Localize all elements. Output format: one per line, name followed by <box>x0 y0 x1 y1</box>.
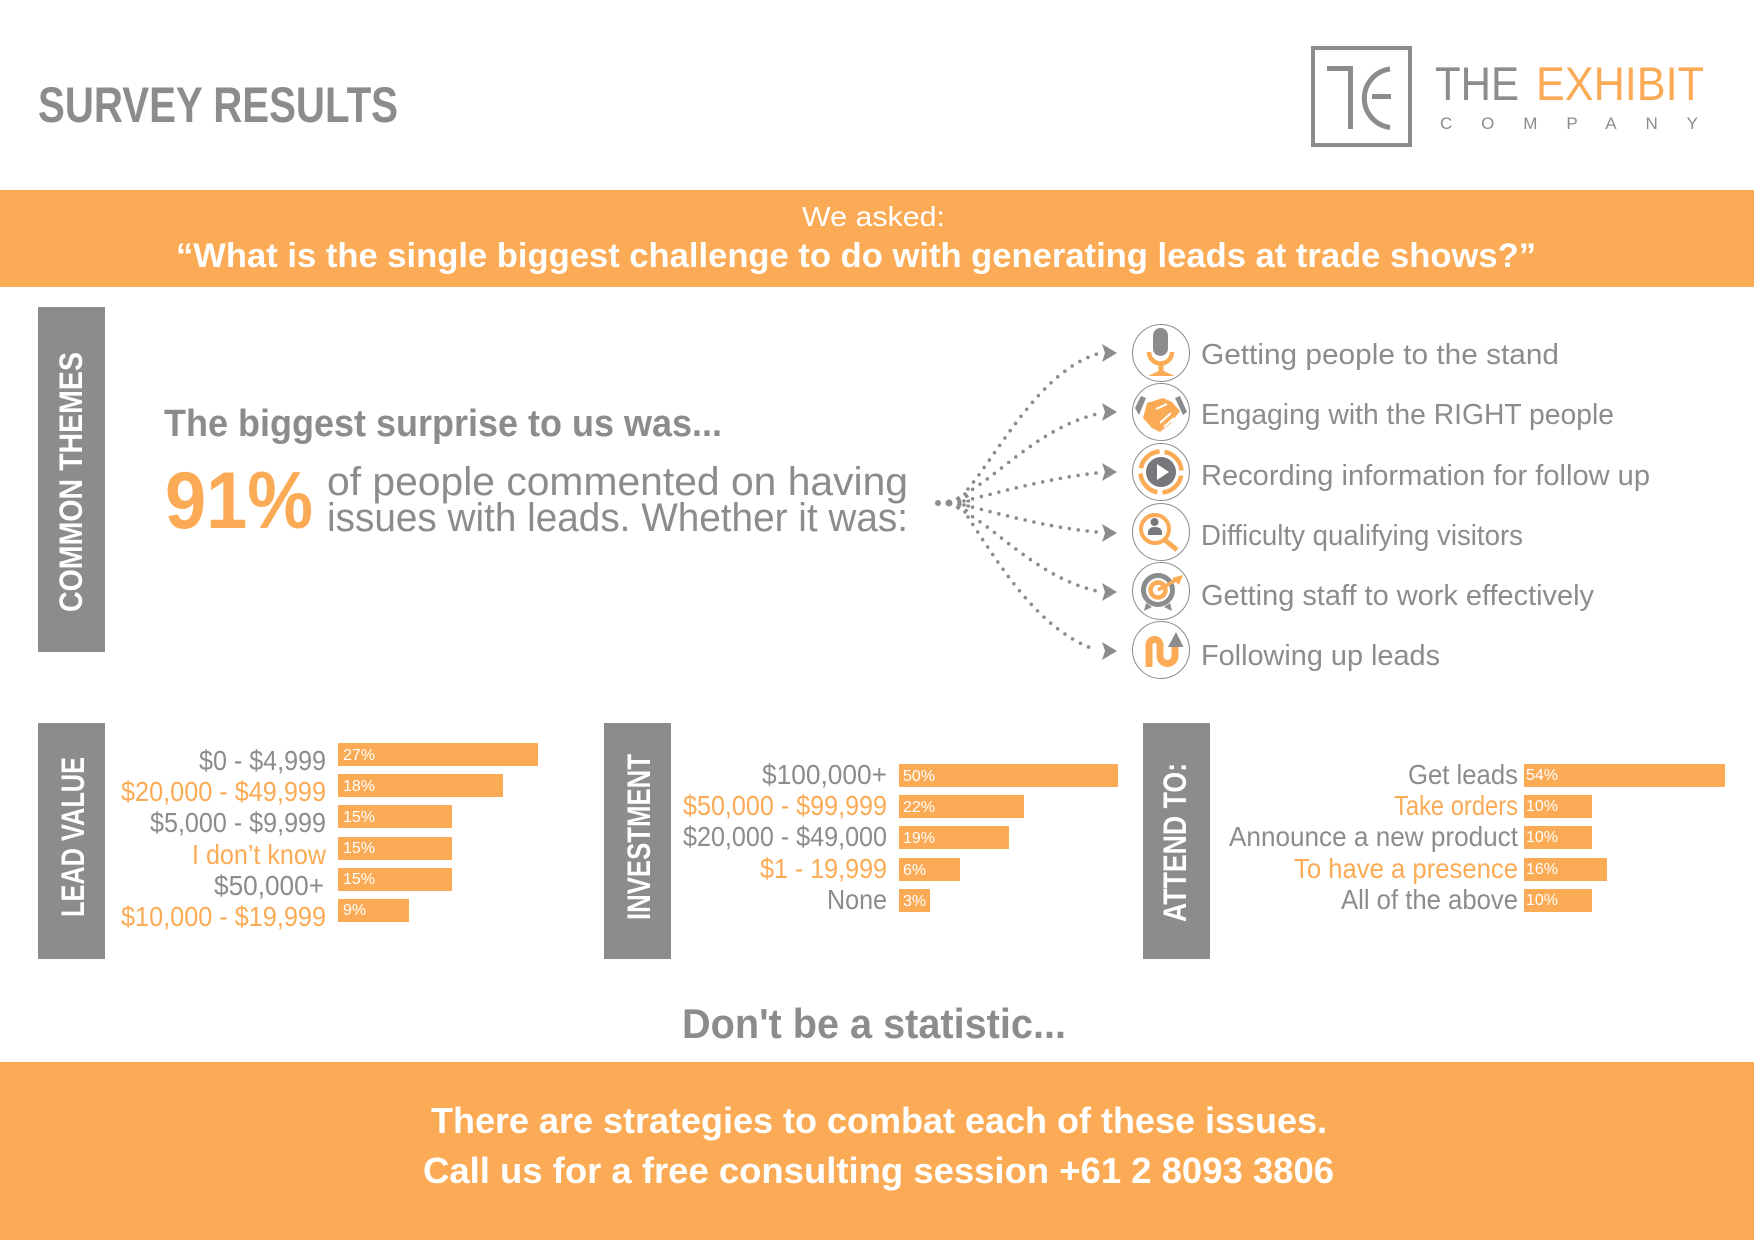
attend to bar chart: 16% <box>1526 861 1558 878</box>
attend to bar chart: Announce a new product <box>1229 821 1518 852</box>
lead value bar chart <box>121 743 538 932</box>
call to action banner: There are strategies to combat each of these issues. <box>431 1100 1327 1141</box>
icon: target <box>1132 562 1190 620</box>
icon: handshake <box>1132 384 1190 440</box>
investment bar chart: $1 - 19,999 <box>760 853 887 884</box>
lead value bar chart: 15% <box>343 809 375 826</box>
icon: upward path <box>1132 622 1190 678</box>
panel label: common themes: COMMON THEMES <box>53 352 89 612</box>
attend to bar chart: 10% <box>1526 829 1558 846</box>
question banner <box>0 190 1754 287</box>
lead value label: LEAD VALUE <box>55 757 91 917</box>
themes list: Engaging with the RIGHT people <box>1201 399 1614 431</box>
lead value bar chart: $10,000 - $19,999 <box>121 901 326 932</box>
attend to bar chart: Take orders <box>1394 790 1518 821</box>
statistic description: of people commented on having <box>327 460 908 504</box>
attend to label: ATTEND TO: <box>1157 763 1193 922</box>
panel: investment <box>604 723 1118 959</box>
lead value bar chart: I don’t know <box>192 839 327 870</box>
investment bar chart: $20,000 - $49,000 <box>683 821 887 852</box>
icon: play button <box>1132 444 1190 500</box>
call to action banner: Call us for a free consulting session +61 2 8093 3806 <box>423 1150 1334 1191</box>
statistic description <box>327 460 908 540</box>
attend to bar chart: 54% <box>1526 767 1558 784</box>
attend to bar chart: To have a presence <box>1294 853 1518 884</box>
attend to bar chart: 10% <box>1526 892 1558 909</box>
lead value bar chart: $50,000+ <box>214 870 324 901</box>
lead value bar chart: $20,000 - $49,999 <box>121 776 326 807</box>
themes list <box>1201 339 1650 672</box>
lead value bar chart: 9% <box>343 902 366 919</box>
attend to bar chart: All of the above <box>1341 884 1518 915</box>
themes list: Getting staff to work effectively <box>1201 580 1594 612</box>
themes list: Following up leads <box>1201 640 1440 672</box>
icon: magnifier with person <box>1132 504 1190 560</box>
surprise heading: The biggest surprise to us was... <box>164 403 722 445</box>
investment bar chart: 6% <box>903 862 926 879</box>
call to action banner <box>0 1062 1754 1240</box>
dotted fan arrows <box>935 344 1117 660</box>
panel label: common themes <box>38 307 105 652</box>
investment bar chart: $50,000 - $99,999 <box>683 790 887 821</box>
attend to bar chart: 10% <box>1526 798 1558 815</box>
lead value bar chart: 27% <box>343 747 375 764</box>
91% statistic: 91% <box>165 456 313 546</box>
lead value label <box>38 723 105 959</box>
themes list: Recording information for follow up <box>1201 460 1650 492</box>
investment label: INVESTMENT <box>621 754 657 920</box>
lead value bar chart: $0 - $4,999 <box>199 745 326 776</box>
attend to label <box>1143 723 1210 959</box>
themes list: Getting people to the stand <box>1201 339 1559 371</box>
panel: lead value <box>38 723 538 959</box>
investment bar chart: 19% <box>903 830 935 847</box>
investment label <box>604 723 671 959</box>
attend to bar chart <box>1229 759 1725 915</box>
lead value bar chart: 15% <box>343 871 375 888</box>
themes list: Difficulty qualifying visitors <box>1201 520 1523 552</box>
icon: microphone <box>1132 324 1190 382</box>
logo <box>1313 48 1704 145</box>
statistic description: issues with leads. Whether it was: <box>327 496 908 540</box>
logo: COMPANY <box>1440 114 1698 133</box>
closing heading: Don't be a statistic... <box>682 1000 1066 1047</box>
panel: attend to <box>1143 723 1725 959</box>
lead value bar chart: 18% <box>343 778 375 795</box>
question banner: “What is the single biggest challenge to do with generating leads at trade shows?” <box>176 237 1536 275</box>
title: SURVEY RESULTS <box>38 77 398 133</box>
logo: THE <box>1435 57 1519 110</box>
investment bar chart: 22% <box>903 799 935 816</box>
investment bar chart: 50% <box>903 768 935 785</box>
lead value bar chart: 15% <box>343 840 375 857</box>
question banner: We asked: <box>802 201 945 232</box>
investment bar chart <box>683 759 1118 915</box>
investment bar chart: 3% <box>903 893 926 910</box>
logo: EXHIBIT <box>1536 57 1704 110</box>
attend to bar chart: Get leads <box>1408 759 1518 790</box>
investment bar chart: $100,000+ <box>762 759 887 790</box>
lead value bar chart: $5,000 - $9,999 <box>150 807 326 838</box>
investment bar chart: None <box>827 884 887 915</box>
